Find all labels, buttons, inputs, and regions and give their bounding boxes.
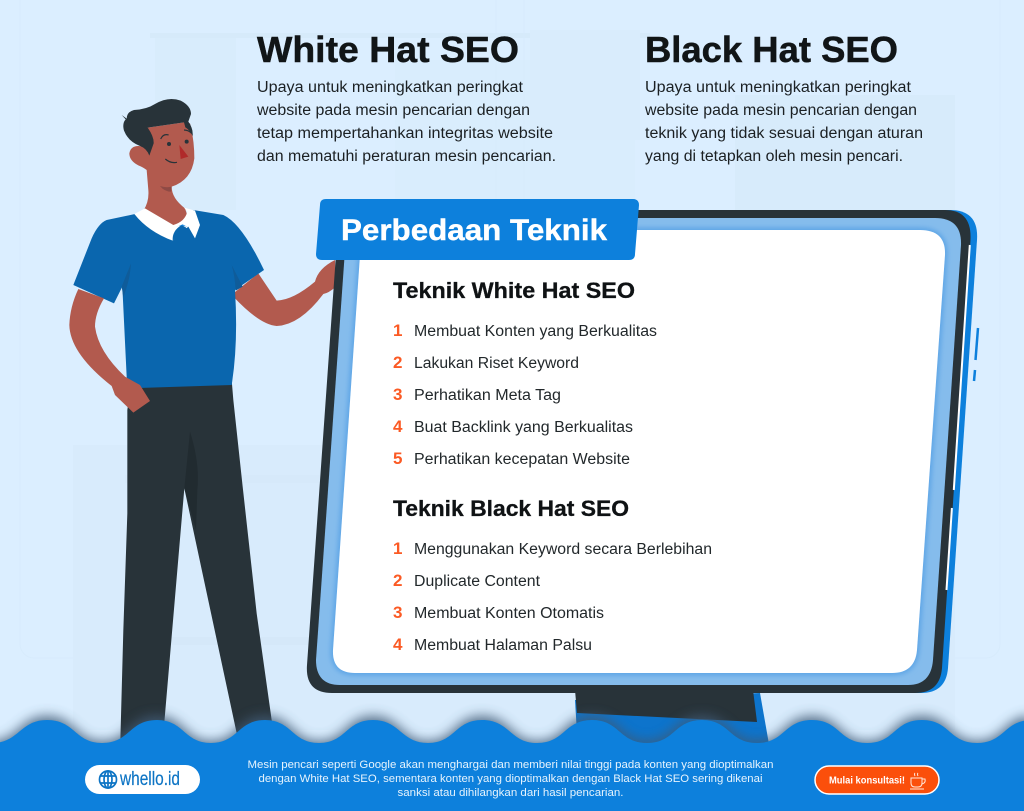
screen bezel bbox=[316, 218, 961, 685]
list: black hat techniques: 4 bbox=[393, 635, 403, 654]
collar bbox=[134, 208, 200, 241]
button: Mulai konsultasi bbox=[815, 766, 939, 794]
text block: Black Hat description: yang di tetapkan oleh mesin pencari. bbox=[645, 148, 903, 165]
list: black hat techniques: 1 bbox=[393, 539, 402, 558]
header tab: Perbedaan Teknik bbox=[341, 214, 607, 247]
footer note: sanksi atau dihilangkan dari hasil pencarian. bbox=[398, 787, 624, 799]
text block: White Hat description: Upaya untuk meningkatkan peringkat bbox=[257, 79, 524, 96]
list: white hat techniques: Lakukan Riset Keyword bbox=[414, 355, 579, 372]
hair bbox=[122, 99, 193, 156]
text block: Black Hat description: Upaya untuk meningkatkan peringkat bbox=[645, 79, 912, 96]
footer note bbox=[248, 759, 774, 799]
person illustration bbox=[69, 99, 336, 753]
shirt bbox=[73, 210, 264, 388]
dark frame bbox=[307, 210, 971, 693]
facial details bbox=[161, 130, 192, 163]
list: black hat techniques: Membuat Halaman Palsu bbox=[414, 637, 592, 654]
footer wave band bbox=[0, 716, 1024, 811]
text block: White Hat description: tetap mempertahankan integritas website bbox=[257, 125, 553, 142]
side accent marks bbox=[974, 328, 978, 381]
glare lines bbox=[946, 245, 970, 590]
text block: Black Hat description: website pada mesin pencarian dengan bbox=[644, 102, 917, 119]
head, neck and collar bbox=[122, 99, 200, 241]
list: white hat techniques: Perhatikan Meta Tag bbox=[414, 387, 561, 404]
list: black hat techniques bbox=[393, 539, 712, 654]
footer note: dengan White Hat SEO, sementara konten yang dioptimalkan dengan Black Hat SEO sering dikenai bbox=[258, 773, 762, 785]
monitor bbox=[307, 210, 977, 693]
right arm bbox=[233, 260, 336, 326]
list: black hat techniques: Membuat Konten Otomatis bbox=[414, 605, 604, 622]
list: white hat techniques: 5 bbox=[393, 449, 402, 468]
logo pill: whello.id bbox=[119, 769, 180, 790]
outer accent bbox=[338, 210, 977, 693]
text block: White Hat description: dan mematuhi peraturan mesin pencarian. bbox=[257, 148, 556, 165]
list: white hat techniques: 3 bbox=[393, 385, 402, 404]
list: black hat techniques: Menggunakan Keyword secara Berlebihan bbox=[414, 541, 712, 558]
header tab bbox=[316, 199, 639, 260]
icon: globe bbox=[100, 771, 116, 788]
list: white hat techniques: Buat Backlink yang Berkualitas bbox=[414, 419, 633, 436]
list: black hat techniques: 2 bbox=[393, 571, 402, 590]
arm, shirt and sleeves bbox=[69, 210, 336, 413]
heading: Black Hat SEO: Black Hat SEO bbox=[645, 29, 898, 70]
trousers bbox=[120, 380, 275, 753]
heading: Teknik Black Hat SEO: Teknik Black Hat SEO bbox=[393, 496, 629, 521]
list: white hat techniques bbox=[393, 321, 657, 468]
list: white hat techniques: Membuat Konten yang Berkualitas bbox=[414, 323, 657, 340]
collar button bbox=[173, 225, 195, 241]
icon: coffee cup bbox=[910, 773, 925, 789]
list: white hat techniques: 4 bbox=[393, 417, 403, 436]
left arm with hand bbox=[69, 289, 150, 413]
monitor stand bbox=[575, 690, 770, 750]
button: Mulai konsultasi: Mulai konsultasi! bbox=[829, 776, 905, 786]
text block: White Hat description: website pada mesin pencarian dengan bbox=[256, 102, 530, 119]
text block: Black Hat description: teknik yang tidak sesuai dengan aturan bbox=[645, 125, 923, 142]
list: white hat techniques: Perhatikan kecepatan Website bbox=[414, 451, 630, 468]
screen bbox=[333, 230, 945, 673]
text block: White Hat description bbox=[256, 79, 556, 165]
list: black hat techniques: 3 bbox=[393, 603, 402, 622]
logo pill bbox=[85, 765, 200, 794]
footer note: Mesin pencari seperti Google akan menghargai dan memberi nilai tinggi pada konten yang dioptimalkan bbox=[248, 759, 774, 771]
heading: White Hat SEO: White Hat SEO bbox=[257, 29, 519, 70]
list: white hat techniques: 2 bbox=[393, 353, 402, 372]
skin bbox=[129, 122, 194, 227]
list: white hat techniques: 1 bbox=[393, 321, 402, 340]
text block: Black Hat description bbox=[644, 79, 923, 165]
heading: Teknik White Hat SEO: Teknik White Hat SEO bbox=[393, 278, 635, 303]
list: black hat techniques: Duplicate Content bbox=[414, 573, 541, 590]
